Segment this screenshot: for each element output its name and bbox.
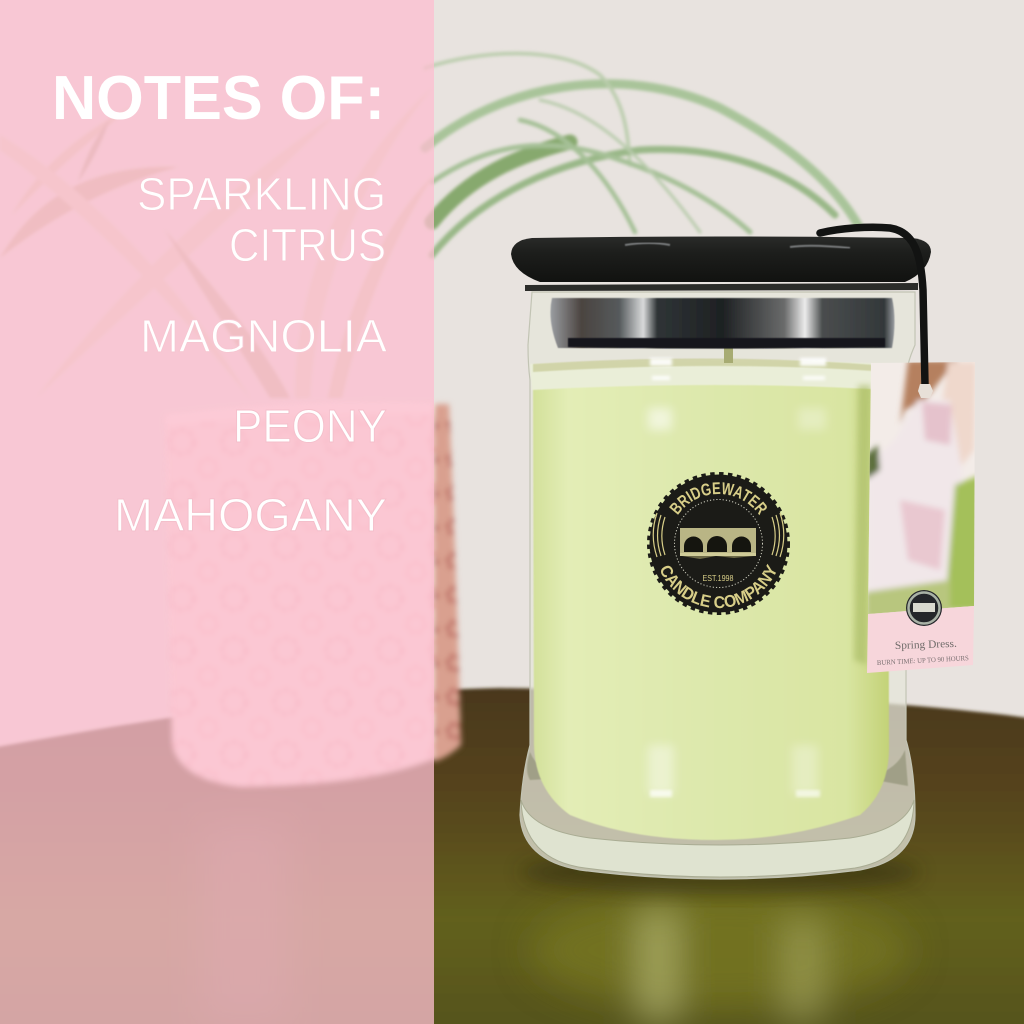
- note: peony: PEONY: [233, 400, 387, 452]
- plant leaves: [0, 53, 858, 398]
- heading: notes of: NOTES OF:: [52, 64, 385, 133]
- note: sparkling citrus: SPARKLING: [137, 168, 386, 220]
- insert lower edge: [568, 338, 885, 348]
- serrated edge: [650, 474, 788, 612]
- wax: [533, 373, 889, 840]
- hang tag: [820, 227, 980, 673]
- lid gasket: [525, 283, 918, 291]
- base shading: [527, 750, 908, 786]
- candle jar: [511, 236, 931, 894]
- note: sparkling citrus: CITRUS: [229, 219, 386, 271]
- right plant: green leaves: [425, 53, 858, 255]
- soft wax reflections: [648, 408, 826, 795]
- note: sparkling citrus: [137, 168, 386, 271]
- wooden lid: [511, 236, 931, 282]
- candle label badge: [647, 472, 790, 615]
- wick: [724, 346, 733, 363]
- pink translucent panel: [0, 0, 434, 1024]
- lid sheen: [625, 243, 850, 248]
- flower pot: [165, 402, 461, 787]
- tag photo: [868, 362, 975, 614]
- pot body: [165, 402, 461, 787]
- mini logo: [906, 590, 942, 626]
- badge core: [650, 475, 787, 612]
- established date: EST.1998: [702, 574, 734, 583]
- jar shadow: [520, 850, 920, 894]
- note: magnolia: MAGNOLIA: [140, 310, 387, 362]
- pot visible edge: [434, 404, 461, 762]
- wax meniscus: [533, 358, 888, 372]
- tag shadow on jar: [854, 385, 871, 665]
- cord: [820, 227, 925, 385]
- lower rim glints: [650, 790, 820, 797]
- dark lid insert seen through glass: [550, 298, 894, 348]
- tag scent name: Spring Dress.: [895, 638, 957, 652]
- glass highlights: [650, 358, 826, 380]
- wax top surface: [530, 360, 888, 390]
- panel text: scent notes: [52, 64, 387, 541]
- glass base: [521, 800, 914, 877]
- side arcs: [653, 513, 784, 557]
- woman in dress: [866, 360, 980, 620]
- tag pink footer: [867, 606, 974, 673]
- table top: [0, 688, 1024, 1024]
- table reflections: [200, 820, 910, 1024]
- tag eyelet: [918, 384, 933, 398]
- note: mahogany: MAHOGANY: [114, 489, 387, 541]
- left plant: pale leaves under panel: [0, 88, 434, 398]
- bridge illustration: [680, 528, 756, 559]
- pot rim: [165, 402, 449, 426]
- glass body: [520, 292, 915, 879]
- brand name bottom: CANDLE COMPANY: [661, 564, 776, 608]
- dotted ring: [674, 500, 762, 588]
- tag burn time: BURN TIME: UP TO 90 HOURS: [877, 654, 969, 667]
- brand name top: BRIDGEWATER: [669, 482, 767, 516]
